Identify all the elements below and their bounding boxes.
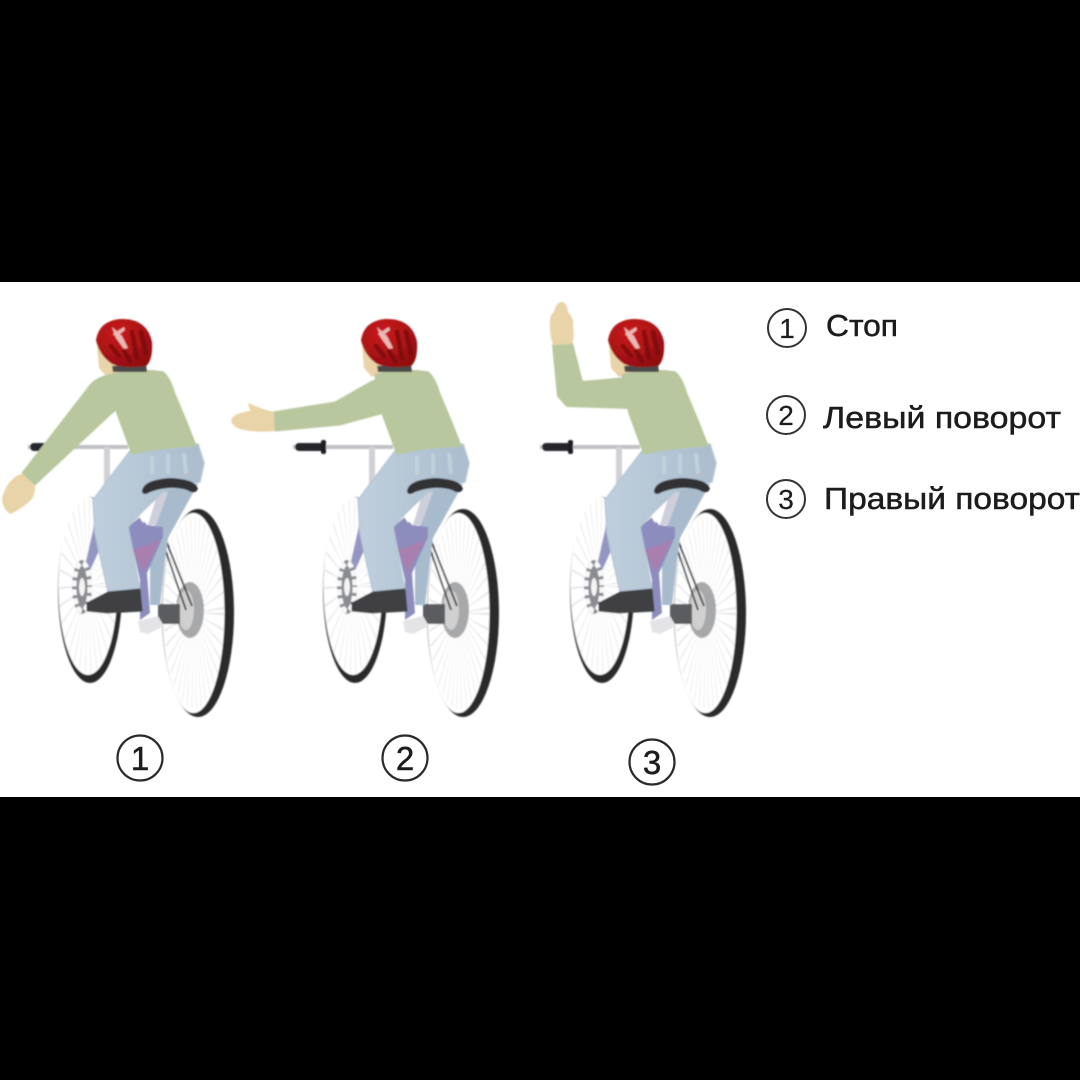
white panel [0, 282, 1080, 797]
legend item 2: 2 [778, 400, 794, 431]
figure 3: right turn signal [540, 302, 746, 717]
legend item 1 [768, 308, 898, 347]
legend item 3: Правый поворот [824, 481, 1080, 516]
hand [2, 474, 35, 514]
figure 1: stop signal [2, 319, 234, 717]
legend item 1: 1 [779, 313, 795, 344]
raised forearm [553, 343, 640, 408]
number badge 1: 1 [131, 740, 149, 777]
number badge 3 [630, 740, 674, 784]
arm extended sideways [273, 379, 395, 431]
legend item 2 [767, 396, 1061, 435]
number badge 1 [118, 736, 162, 780]
number badge 2 [382, 736, 428, 780]
number badge 3: 3 [643, 744, 661, 781]
legend item 1: Стоп [826, 308, 898, 343]
legend item 3 [767, 480, 1080, 518]
legend item 3: 3 [778, 484, 794, 515]
legend item 2: Левый поворот [823, 400, 1061, 435]
number badge 2: 2 [396, 740, 414, 777]
hand [231, 403, 275, 432]
figure 2: left turn signal [231, 319, 499, 717]
raised hand [550, 302, 574, 345]
arm pointing down [22, 374, 122, 485]
